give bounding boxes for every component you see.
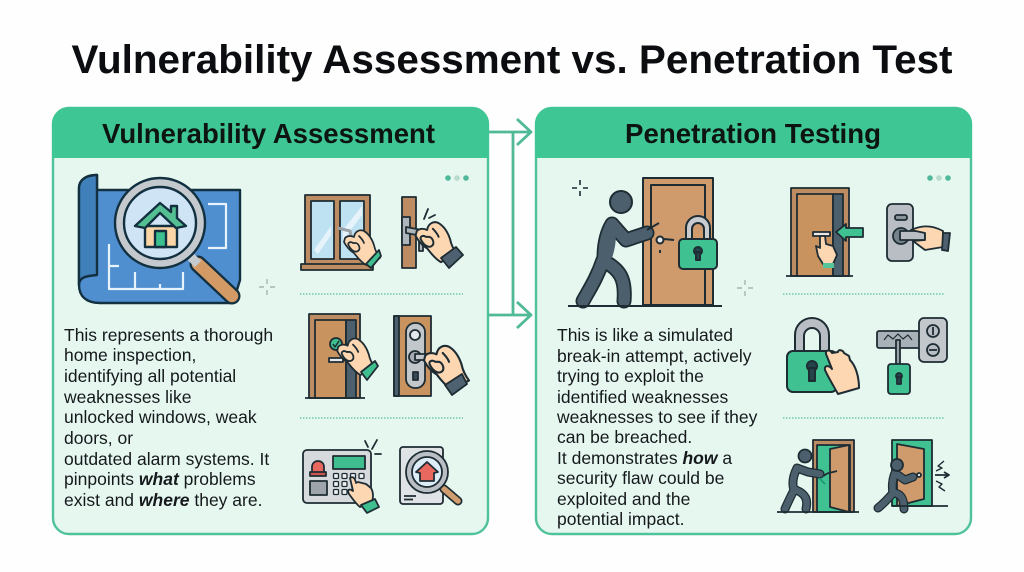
icon: person breaching door (878, 440, 949, 509)
connector arrows (489, 119, 531, 328)
divider dots (783, 293, 945, 295)
icon: lock pick in panel with small padlock (877, 318, 947, 394)
panel header: vulnerability assessment: Vulnerability Assessment (102, 118, 435, 149)
body text: vulnerability assessment: exist and where they are. (64, 490, 262, 510)
icon: hand testing door handle (394, 316, 469, 396)
body text: penetration testing: trying to exploit the (557, 366, 704, 386)
body text: penetration testing: security flaw could be (557, 468, 724, 488)
divider dots (300, 293, 463, 295)
icon: padlock and hand (787, 318, 859, 394)
icon: alarm keypad (303, 440, 381, 513)
sparkle (259, 279, 275, 295)
body text: vulnerability assessment: weaknesses like (63, 387, 191, 407)
body text: vulnerability assessment: pinpoints what problems (64, 469, 256, 489)
icon: person opening door (777, 440, 859, 512)
body text: vulnerability assessment: doors, or (64, 428, 133, 448)
body text: vulnerability assessment: outdated alarm systems. It (64, 449, 269, 469)
body text: penetration testing: weaknesses to see if they (556, 407, 758, 427)
icon: person picking locked door (568, 178, 722, 306)
icon: hand testing door lock with check (305, 314, 378, 398)
icon: door with arrow and hand on handle (786, 188, 863, 276)
body text: vulnerability assessment: identifying all potential (64, 366, 236, 386)
body text: penetration testing (556, 325, 758, 529)
body text: penetration testing: exploited and the (557, 489, 690, 509)
icon: blueprint with magnifier over house (79, 175, 240, 303)
panel: vulnerability assessment (52, 107, 489, 534)
body text: vulnerability assessment (63, 325, 273, 510)
divider dots (300, 417, 463, 419)
icon: hand testing door latch (402, 197, 463, 268)
sparkle (572, 180, 588, 196)
title: Vulnerability Assessment vs. Penetration Test (72, 38, 952, 82)
body text: penetration testing: identified weaknesses (557, 387, 728, 407)
status dots (927, 175, 951, 181)
icon: inspection report with magnifier (400, 447, 458, 504)
icon: hand testing window (301, 195, 381, 270)
body text: penetration testing: potential impact. (557, 509, 684, 529)
divider dots (783, 417, 945, 419)
body text: vulnerability assessment: home inspection, (64, 345, 196, 365)
panel: penetration testing (535, 107, 972, 534)
panel header: penetration testing: Penetration Testing (625, 118, 881, 149)
body text: penetration testing: This is like a simulated (557, 325, 733, 345)
body text: vulnerability assessment: unlocked windows, weak (64, 407, 257, 427)
body text: vulnerability assessment: This represents a thorough (64, 325, 273, 345)
body text: penetration testing: can be breached. (557, 427, 692, 447)
body text: penetration testing: break-in attempt, actively (557, 346, 752, 366)
body text: penetration testing: It demonstrates how a (557, 448, 732, 468)
status dots (445, 175, 469, 181)
icon: hand on lever handle (887, 204, 950, 261)
panel header: vulnerability assessment (52, 107, 489, 158)
sparkle (737, 280, 753, 296)
panel header: penetration testing (535, 107, 972, 158)
